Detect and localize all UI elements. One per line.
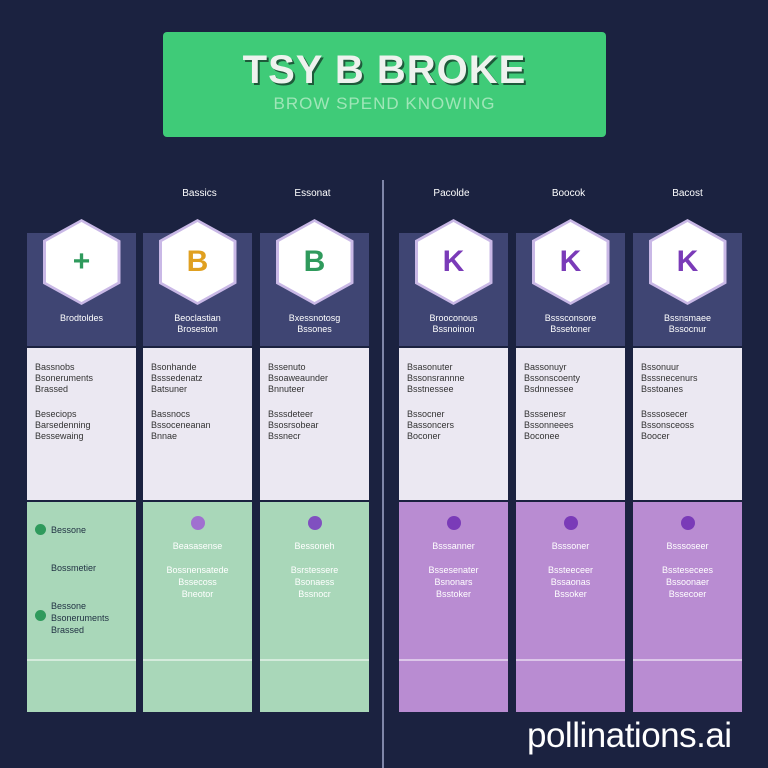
column 4: Bsasonuter: [407, 362, 453, 372]
column 1: Beseciops: [35, 409, 77, 419]
column 1: Brassed: [51, 625, 84, 635]
column 2: Bssoceneanan: [151, 420, 211, 430]
column 1: Bessewaing: [35, 431, 84, 441]
column 6: Bsssosecer: [641, 409, 688, 419]
column 5: Bssetoner: [550, 324, 591, 334]
column 1: Bessone: [51, 525, 86, 535]
column 3: Bsssdeteer: [268, 409, 313, 419]
column 3: Bssnocr: [298, 589, 331, 599]
column 3: Bessoneh: [294, 541, 335, 551]
column 4: Brooconous: [429, 313, 478, 323]
column 4: Bssonsrannne: [407, 373, 465, 383]
column 5: Bassonuyr: [524, 362, 567, 372]
column 4: [399, 219, 508, 712]
column 3: Bsosrsobear: [268, 420, 319, 430]
column 4: Boconer: [407, 431, 441, 441]
column 6: Bsssoseer: [666, 541, 709, 551]
column 1: [27, 219, 136, 712]
column 4: Bsstnessee: [407, 384, 454, 394]
column 5: Bsssconsore: [545, 313, 596, 323]
column 6: Boocer: [641, 431, 670, 441]
column 1: Bessone: [51, 601, 86, 611]
column 3: Bssnecr: [268, 431, 301, 441]
column 3: [260, 219, 369, 712]
column 1: Brodtoldes: [60, 313, 103, 323]
column 5: Bssonscoenty: [524, 373, 580, 383]
column 5: Bssteeceer: [548, 565, 593, 575]
column 4: Bssnoinon: [432, 324, 475, 334]
column 1: Bsoneruments: [35, 373, 93, 383]
column 2: Bnnae: [151, 431, 177, 441]
column 1: Barsedenning: [35, 420, 91, 430]
column 4: Bassoncers: [407, 420, 454, 430]
column 5: Bsdnnessee: [524, 384, 574, 394]
divider: [382, 180, 384, 768]
column 1: Bassnobs: [35, 362, 75, 372]
column 5: Bsssoner: [552, 541, 589, 551]
title banner: [163, 32, 606, 137]
column 2: Beoclastian: [174, 313, 221, 323]
column 3: B: [304, 245, 325, 278]
column 3: Bsrstessere: [291, 565, 338, 575]
text: Pacolde: [433, 188, 470, 199]
text: Bassics: [182, 188, 217, 199]
column 3: Bxessnotosg: [289, 313, 340, 323]
column 5: Boconee: [524, 431, 560, 441]
column 3: Bnnuteer: [268, 384, 305, 394]
column 2: Bsssedenatz: [151, 373, 203, 383]
column 6: Bssnsmaee: [664, 313, 711, 323]
column 4: Bsnonars: [434, 577, 473, 587]
column 6: Bsstesecees: [662, 565, 713, 575]
column 6: Bssecoer: [669, 589, 706, 599]
column 3: Bsonaess: [295, 577, 334, 587]
column 5: K: [560, 245, 581, 278]
column 4: Bssesenater: [428, 565, 479, 575]
column 2: Bossnensatede: [166, 565, 229, 575]
column 3: Bssones: [297, 324, 332, 334]
text: Essonat: [294, 188, 331, 199]
column 4: K: [443, 245, 464, 278]
column 6: Bsssnecenurs: [641, 373, 698, 383]
column headers: [182, 188, 703, 199]
column 5: Bssoker: [554, 589, 587, 599]
column 4: Bsssanner: [432, 541, 475, 551]
column 6: Bsstoanes: [641, 384, 683, 394]
column 5: Bssonneees: [524, 420, 574, 430]
column 4: Bsstoker: [436, 589, 471, 599]
column 2: Beasasense: [173, 541, 222, 551]
column 6: Bssonsceoss: [641, 420, 694, 430]
column 2: B: [187, 245, 208, 278]
column 4: Bssocner: [407, 409, 445, 419]
column 6: Bssonuur: [641, 362, 679, 372]
column 2: Bneotor: [182, 589, 213, 599]
column 6: Bssocnur: [669, 324, 706, 334]
column 1: +: [73, 245, 90, 278]
subtitle: BROW SPEND KNOWING: [273, 94, 496, 113]
column 3: Bssenuto: [268, 362, 306, 372]
column 5: Bssaonas: [551, 577, 590, 587]
watermark: pollinations.ai: [527, 716, 732, 755]
column 5: [516, 219, 625, 712]
column 5: Bsssenesr: [524, 409, 566, 419]
column 2: [143, 219, 252, 712]
text: Bacost: [672, 188, 703, 199]
column 2: Bassnocs: [151, 409, 190, 419]
column 6: K: [677, 245, 698, 278]
title text: TSY B BROKE: [243, 48, 526, 92]
column 1: Bossmetier: [51, 563, 96, 573]
column 2: Broseston: [177, 324, 218, 334]
column 2: Batsuner: [151, 384, 187, 394]
column 1: Bsoneruments: [51, 613, 109, 623]
column 1: Brassed: [35, 384, 68, 394]
column 6: [633, 219, 742, 712]
column 2: Bssecoss: [178, 577, 217, 587]
column 6: Bssoonaer: [666, 577, 709, 587]
text: Boocok: [552, 188, 585, 199]
column 2: Bsonhande: [151, 362, 197, 372]
column 3: Bsoaweaunder: [268, 373, 328, 383]
